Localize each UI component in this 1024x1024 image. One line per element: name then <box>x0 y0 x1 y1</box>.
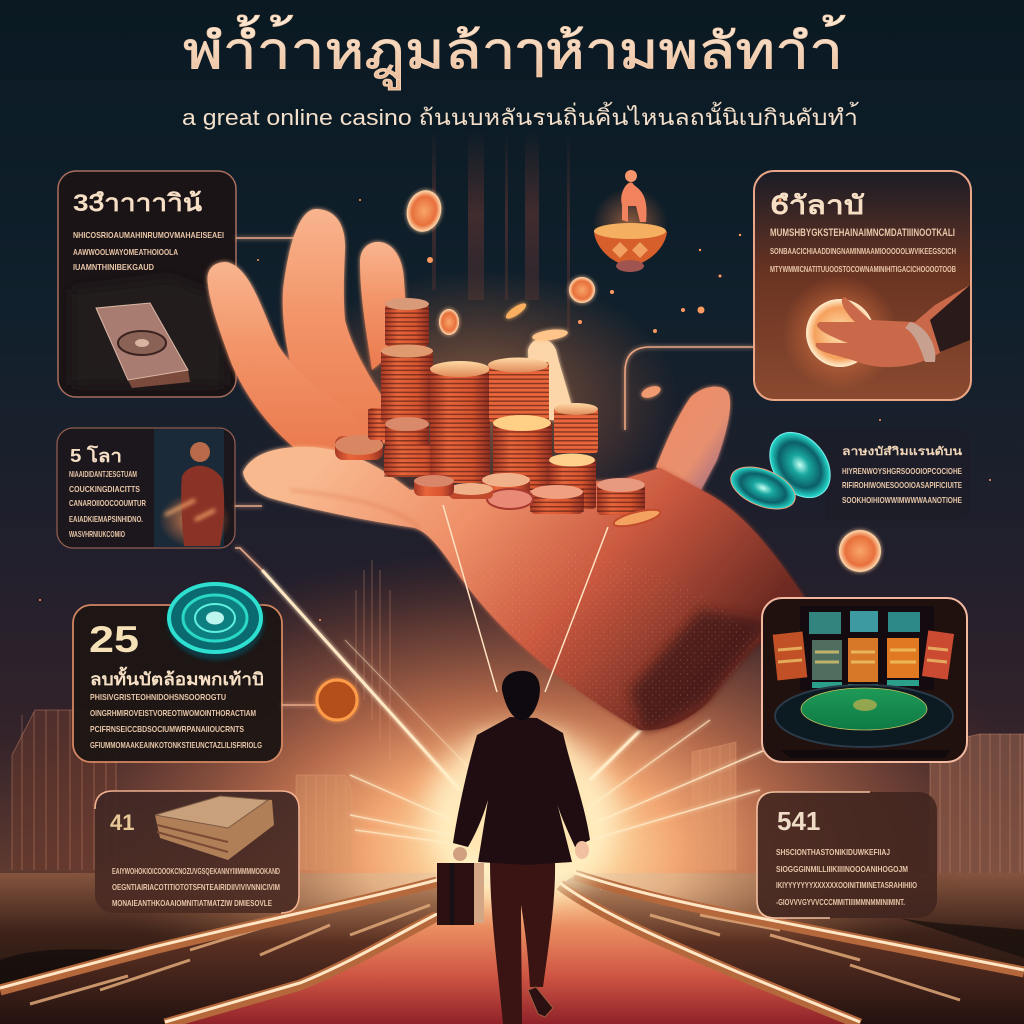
icon: stack of money <box>155 796 274 860</box>
slot screens <box>773 611 954 690</box>
body text: IKIYYYYYYYXXXXXXOOINITIMINETASRAHIHIIO <box>776 880 917 890</box>
body text <box>90 692 262 750</box>
panel: 5 <box>57 428 235 548</box>
flying coins <box>317 186 881 720</box>
hand <box>575 841 589 859</box>
body text <box>69 469 146 539</box>
body text <box>770 227 956 274</box>
heading: ลบทั้นบัตล้อมพกเท้าบิ <box>90 666 264 689</box>
legs <box>490 862 555 1024</box>
heading: ลาษงบัสำิมแรนดับน <box>842 445 963 458</box>
body text: EAIADKIEMAPSINHIDNO. <box>69 514 143 524</box>
heading number: 41 <box>110 810 134 835</box>
jacket <box>453 717 590 865</box>
railway tracks <box>0 873 1024 1024</box>
hand holding coins <box>207 209 806 732</box>
glowing orb and hand <box>782 275 970 391</box>
panel: poker chips and text <box>725 421 970 520</box>
body text: HIYRENWOYSHGRSOOOIOPCOCIOHE <box>842 466 962 476</box>
red carpet <box>170 885 860 1024</box>
ground <box>0 873 1024 1024</box>
panel: 33 <box>58 171 236 397</box>
palm shadow <box>630 610 770 732</box>
heading number: 25 <box>89 619 139 660</box>
rails <box>0 875 1024 1024</box>
card table <box>775 685 953 758</box>
body text: MUMSHBYGKSTEHAINAIMNCMDATIIINOOTKALI <box>770 227 955 239</box>
body text: RIFIROHIWONESOOOIOASAPIFICIUITE <box>842 480 962 490</box>
heading: 6ำัลาบั <box>771 190 865 220</box>
icon: teal chip <box>168 584 264 660</box>
body text <box>776 847 917 907</box>
body text <box>842 466 962 505</box>
body text: PHISIVGRISTEOHNIDOHSNSOOROGTU <box>90 692 226 702</box>
icon: banknote <box>96 303 190 388</box>
heading: 5 โลา <box>70 445 122 466</box>
palm speckle <box>450 545 760 730</box>
hand to man strings <box>443 505 608 692</box>
body text: OINGRHMIROVEISTVOREOTIWOMOINTHORACTIAM <box>90 708 256 718</box>
body text: EAIYWOHOKIOICOOOKCNOZUVGSQEKANNYIIIMMMMOOKAND <box>112 866 280 876</box>
palm <box>243 447 806 730</box>
connector lines <box>235 238 762 705</box>
heading number: 541 <box>777 806 820 836</box>
briefcase <box>437 847 484 925</box>
skyline <box>12 560 1024 875</box>
body text: NIAAIDIDANTJESGTUAM <box>69 469 137 479</box>
sparkles <box>39 198 991 621</box>
body text <box>112 866 280 908</box>
glowing figure <box>159 442 231 548</box>
body text: SOOKHOIHIOWWIMWWWAANOTIOHE <box>842 495 962 505</box>
body text: SONBAACICHIAADDINGNAMINMAAMIOOOOOLWVIKEEGSCICH <box>770 246 956 256</box>
body text: IUAMNTHINIBEKGAUD <box>73 262 154 272</box>
title: พำ้ำ้าหฎูมล้าๅห้ามพลัทาำ้ <box>183 15 845 90</box>
body text: MONAIEANTHKOAAIOMNITIATMATZIW DMIESOVLE <box>112 898 272 908</box>
subtitle: a great online casino ถ้นนบหลันรนถิ่นคิ้นไหนลถนั้นิเบกินคับทำ้ <box>182 102 859 130</box>
body text: AAWWOOLWAYOMEATHOIOOLA <box>73 247 178 257</box>
body text: -GIOVVVGYVVCCCMMITIIIIMMNMMINIMINT. <box>776 897 905 907</box>
shoe <box>528 987 553 1017</box>
panel edge <box>95 791 299 913</box>
panel edge <box>757 792 870 918</box>
panel: 25 <box>73 584 282 762</box>
body text: COUCKINGDIACITTS <box>69 484 140 494</box>
palm crease <box>290 490 420 528</box>
body text <box>73 230 224 272</box>
body text: NHICOSRIOAUMAHINRUMOVMAHAEISEAEI <box>73 230 224 240</box>
icon: chips <box>725 421 843 517</box>
body text: SHSCIONTHASTONIKIDUWKEFIIAJ <box>776 847 890 857</box>
back fingers <box>207 209 730 492</box>
cloth backdrop <box>72 278 226 385</box>
body text: WASVHRNIUKCOMIO <box>69 529 125 539</box>
panel: casino <box>762 598 967 762</box>
body text: OEGNTIAIRIACOTITIOTOTSFNTEAIRIDIIVIVIVNNICIVIM <box>112 882 280 892</box>
light beams <box>262 570 765 843</box>
body text: SIOGGGINMILLIIIKIIIINOOOANIHOGOJM <box>776 864 908 874</box>
heading: 33ำาาาาิน้ <box>73 190 203 217</box>
sleepers <box>30 888 960 1004</box>
panel: 6 <box>754 171 971 400</box>
man with briefcase <box>427 671 617 1024</box>
panel: 41 <box>95 791 299 913</box>
body text: PCIFRNSEICCBDSOCIUMWRPANAIIOUCRNTS <box>90 724 244 734</box>
panel: 541 <box>757 792 937 918</box>
body text: CANAROIIOOCOOUMTUR <box>69 498 146 508</box>
coin stacks <box>335 298 662 530</box>
body text: GFIUMMOMAAKEAINKOTONKSTIEUNCTAZLILISFIRIOLG <box>90 740 262 750</box>
ballast <box>0 875 1024 1024</box>
icon: pedestal bowl with figure <box>592 170 668 272</box>
head <box>502 671 540 720</box>
